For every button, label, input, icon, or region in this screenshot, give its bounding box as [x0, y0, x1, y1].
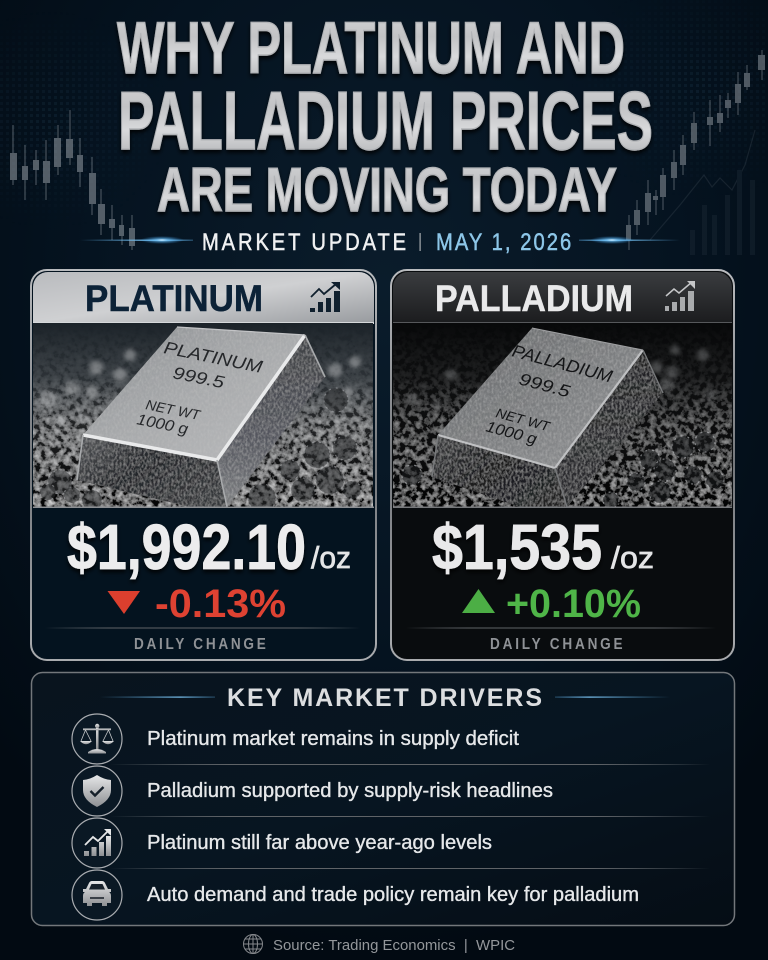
driver 4: Auto demand and trade policy remain key for palladium [147, 884, 639, 906]
drivers heading: KEY MARKET DRIVERS [227, 684, 542, 712]
ingot engraving: 1000 g [484, 418, 539, 448]
driver 3 [72, 818, 492, 868]
icon: growth chart [72, 818, 122, 868]
icon: globe [244, 934, 262, 954]
ingot engraving [135, 337, 265, 438]
palladium bar photo [393, 323, 732, 508]
platinum label: DAILY CHANGE [134, 636, 266, 653]
platinum header: PLATINUM [85, 278, 263, 319]
subtitle: market update and date [80, 228, 680, 255]
nuggets [402, 432, 724, 508]
source line: Source: Trading Economics | WPIC [273, 938, 515, 954]
palladium price: $1,535 [432, 511, 602, 583]
icon: scales [72, 714, 122, 764]
icon: car [72, 870, 122, 920]
palladium header [393, 272, 732, 323]
palladium header: PALLADIUM [435, 278, 633, 319]
palladium daily change: +0.10% [506, 582, 641, 626]
driver 2 [72, 766, 553, 816]
subtitle: market update and date: MAY 1, 2026 [436, 228, 571, 255]
ingot engraving: NET WT [144, 396, 203, 423]
left candlestick chart [10, 110, 135, 250]
icon: chart [310, 282, 340, 312]
driver 1 [72, 714, 519, 764]
subtitle: market update and date: MARKET UPDATE [202, 228, 406, 255]
bokeh highlights [408, 345, 715, 410]
ingot engraving: NET WT [494, 405, 553, 435]
ingot engraving: 1000 g [135, 411, 190, 438]
panel: platinum card [31, 270, 376, 660]
platinum header [33, 272, 374, 323]
platinum ingot [77, 327, 325, 507]
platinum price: /oz [311, 540, 351, 575]
icon: chart [665, 281, 695, 311]
driver 1: Platinum market remains in supply deficit [147, 728, 519, 750]
panel: key market drivers [32, 672, 734, 926]
palladium label: DAILY CHANGE [490, 636, 623, 653]
title: ARE MOVING TODAY [157, 156, 617, 225]
right background trend line and bars [650, 130, 755, 255]
driver 4 [72, 870, 639, 920]
nuggets [40, 388, 361, 512]
driver 3: Platinum still far above year-ago levels [147, 832, 492, 854]
platinum bar photo [33, 323, 374, 512]
panel: palladium card [391, 270, 734, 660]
platinum price: $1,992.10 [67, 511, 306, 583]
ingot engraving: PLATINUM [162, 337, 265, 377]
ingot engraving: PALLADIUM [510, 341, 615, 387]
icon: shield [72, 766, 122, 816]
platinum daily change: -0.13% [155, 582, 286, 626]
bokeh highlights [39, 349, 361, 426]
ingot engraving [484, 341, 615, 448]
ingot engraving: 999.5 [171, 363, 227, 392]
driver 2: Palladium supported by supply-risk headlines [147, 780, 553, 802]
title [117, 8, 653, 225]
right candlestick chart [626, 50, 765, 250]
dotted texture [0, 48, 753, 159]
palladium price: /oz [611, 540, 654, 575]
ingot engraving: 999.5 [517, 370, 573, 401]
palladium ingot [432, 328, 663, 507]
